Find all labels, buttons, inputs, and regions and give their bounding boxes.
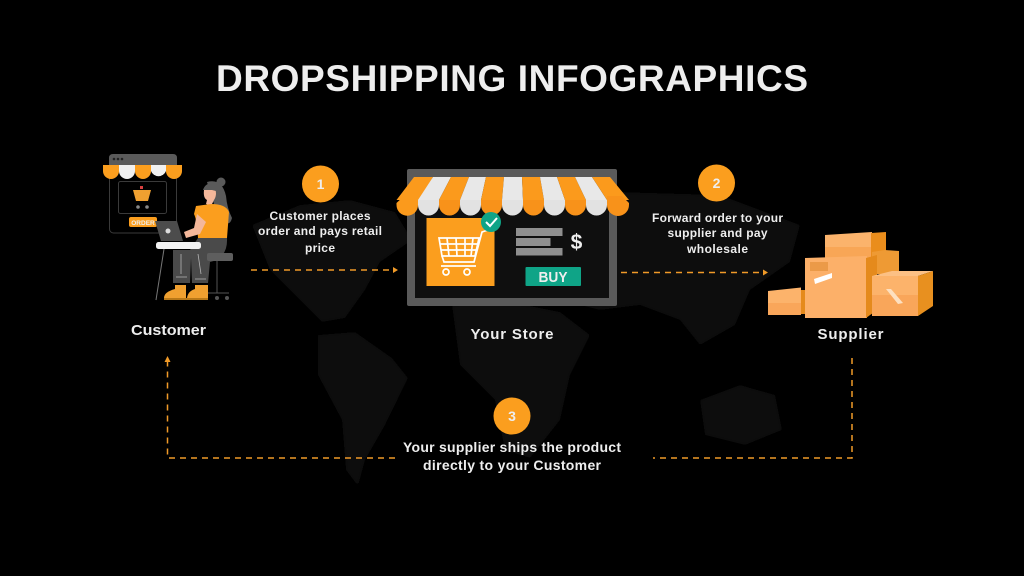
buy button <box>526 267 581 286</box>
label: your store: Your Store <box>470 326 554 343</box>
shop window <box>103 154 182 233</box>
awning <box>396 177 629 216</box>
dollar sign: $ <box>571 231 583 254</box>
store frame <box>407 169 617 306</box>
step 2 text: wholesale <box>686 242 748 256</box>
step 3 badge: 3 <box>508 408 516 424</box>
arrow: store to supplier <box>621 270 768 276</box>
step 1 text: order and pays retail <box>258 224 382 238</box>
step 2 badge: 2 <box>713 175 721 191</box>
step 2 badge <box>698 164 735 202</box>
laptop and table <box>155 221 201 300</box>
big box <box>805 255 877 318</box>
back box <box>825 232 899 274</box>
label: supplier: Supplier <box>818 326 884 343</box>
cart tile <box>426 218 494 286</box>
title: DROPSHIPPING INFOGRAPHICS <box>216 58 808 99</box>
step 1 text: Customer places <box>270 209 371 223</box>
right box <box>872 271 933 316</box>
buy button: BUY <box>538 270 568 286</box>
label: customer: Customer <box>131 322 206 339</box>
small left box <box>768 288 806 315</box>
arrow: return to customer <box>164 356 395 458</box>
arrow: supplier down and across <box>653 358 852 458</box>
step 2 text: supplier and pay <box>668 226 768 240</box>
step 2 text <box>652 211 783 256</box>
store screen <box>415 177 609 298</box>
customer icon <box>103 154 233 300</box>
step 1 badge: 1 <box>317 176 325 192</box>
check badge <box>481 212 501 232</box>
arrow: customer to store <box>251 267 398 273</box>
step 3 text: directly to your Customer <box>423 457 602 473</box>
step 3 badge <box>494 398 530 434</box>
step 1 badge <box>302 166 339 202</box>
stool <box>207 253 233 300</box>
step 2 text: Forward order to your <box>652 211 783 225</box>
price bars <box>516 228 562 256</box>
supplier boxes <box>768 232 933 318</box>
step 1 text: price <box>305 241 335 255</box>
step 3 text: Your supplier ships the product <box>403 439 621 455</box>
world map background <box>252 192 800 486</box>
woman <box>164 178 232 300</box>
step 3 text <box>403 439 621 473</box>
shop window: ORDER <box>131 220 155 227</box>
store icon <box>396 169 629 306</box>
step 1 text <box>258 209 382 255</box>
